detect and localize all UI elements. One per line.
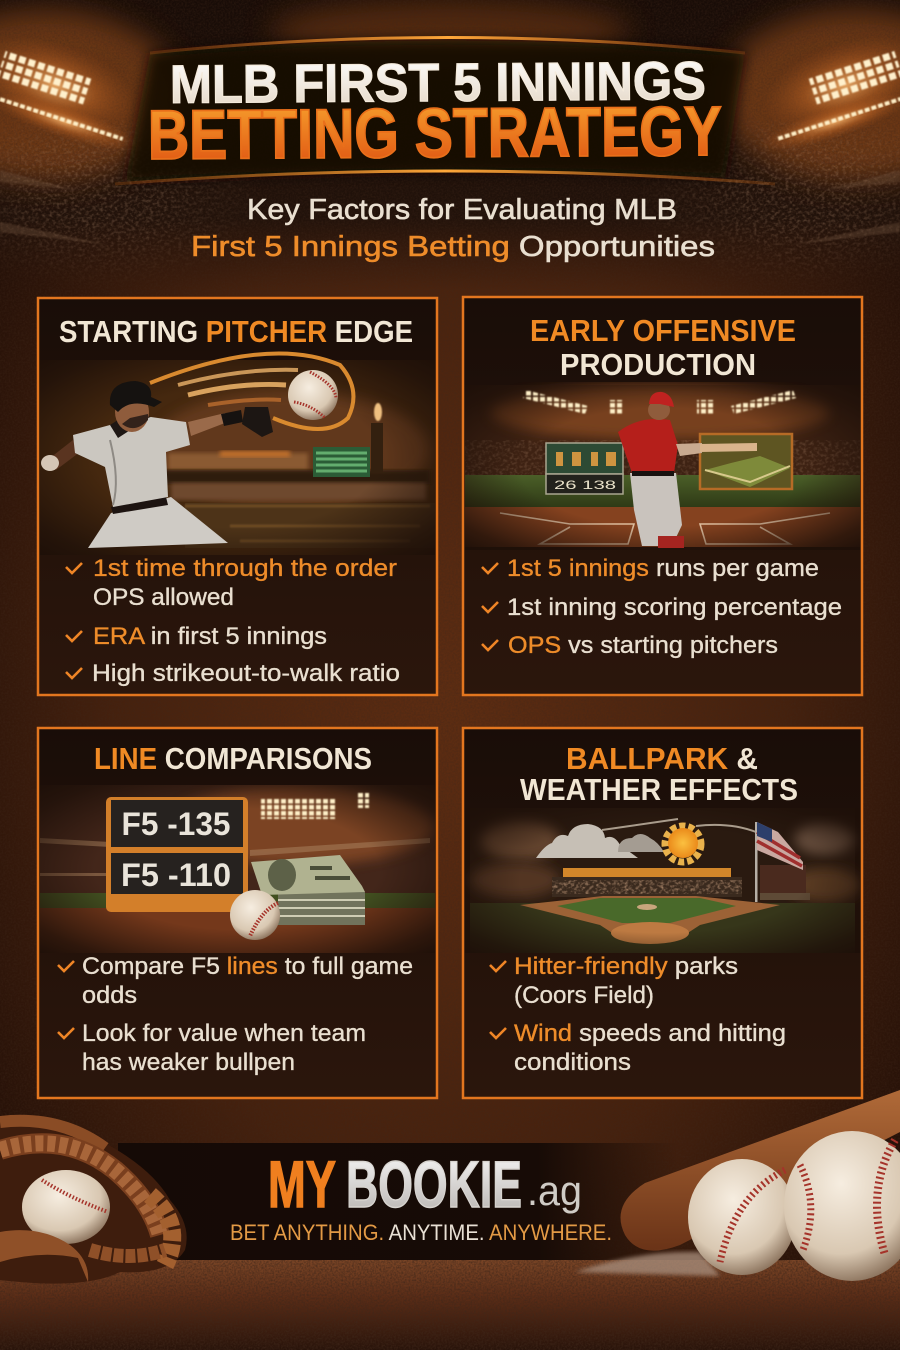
logo: MY	[268, 1147, 336, 1221]
motion swoosh	[150, 353, 353, 429]
checklist: offense: 1st inning scoring percentage	[507, 594, 842, 621]
checklist: line comparisons: has weaker bullpen	[82, 1049, 295, 1076]
baseball	[288, 370, 338, 420]
checklist: offense: OPS vs starting pitchers	[508, 632, 778, 659]
panel: ballpark and weather	[463, 728, 862, 1098]
odds board	[106, 797, 248, 912]
stands	[552, 865, 810, 900]
checklist: ballpark: Hitter-friendly parks	[514, 953, 738, 980]
heading: early offensive production: EARLY OFFENSIVE	[530, 313, 796, 348]
title line 1: MLB FIRST 5 INNINGS	[170, 51, 706, 115]
illustration: odds board and cash	[40, 785, 435, 953]
panel: line comparisons	[38, 728, 437, 1098]
checklist: ballpark: Wind speeds and hitting	[514, 1020, 786, 1047]
checklist: line comparisons: Compare F5 lines to full game	[82, 953, 413, 980]
illustration: ballpark	[465, 808, 860, 953]
infield	[520, 896, 780, 944]
footer logo block	[118, 1142, 683, 1260]
checklist: line comparisons: Look for value when team	[82, 1020, 366, 1047]
icon: bat and baseballs	[575, 1090, 900, 1281]
clouds	[536, 824, 664, 858]
cash stack	[251, 855, 365, 925]
stadium lamps	[261, 792, 369, 819]
checklist: offense	[482, 555, 842, 659]
heading: ballpark and weather	[520, 741, 798, 807]
checklist: ballpark	[490, 953, 786, 1076]
pitcher figure	[41, 381, 273, 548]
checklist: line comparisons	[58, 953, 413, 1076]
checklist: pitcher: OPS allowed	[93, 584, 234, 611]
stadium lights left	[0, 19, 149, 162]
scoreboard	[546, 443, 623, 494]
odds board: F5 -135	[122, 806, 230, 842]
tagline: BET ANYTHING. ANYTIME. ANYWHERE.	[230, 1220, 612, 1245]
flag	[755, 822, 803, 902]
sun	[665, 826, 701, 862]
heading: ballpark and weather: BALLPARK &	[566, 741, 758, 776]
icon: glove and ball	[0, 1118, 187, 1284]
title line 2: BETTING STRATEGY	[148, 92, 722, 174]
checklist: ballpark: conditions	[514, 1049, 631, 1076]
checklist: pitcher: ERA in first 5 innings	[93, 623, 327, 650]
baseball	[230, 890, 280, 940]
batter figure	[618, 392, 757, 548]
checklist: pitcher: High strikeout-to-walk ratio	[92, 660, 400, 687]
scoreboard	[313, 447, 370, 477]
title banner	[115, 38, 775, 184]
checklist: offense: 1st 5 innings runs per game	[507, 555, 819, 582]
ground: infield dirt	[0, 1260, 900, 1350]
scoreboard: 26 138	[554, 478, 617, 492]
heading: line comparisons: LINE COMPARISONS	[94, 741, 372, 776]
checklist: ballpark: (Coors Field)	[514, 982, 654, 1009]
heading: early offensive production	[530, 313, 796, 382]
logo: BOOKIE	[346, 1147, 522, 1221]
checklist: line comparisons: odds	[82, 982, 137, 1009]
heading: ballpark and weather: WEATHER EFFECTS	[520, 772, 798, 807]
checklist: pitcher: 1st time through the order	[93, 555, 397, 582]
panel: early offensive production	[463, 297, 862, 695]
illustration: batter	[465, 384, 860, 550]
odds board: F5 -110	[121, 857, 231, 893]
subtitle	[191, 194, 715, 263]
subtitle: Key Factors for Evaluating MLB	[247, 194, 677, 226]
logo	[268, 1147, 582, 1221]
illustration: pitcher	[40, 353, 435, 555]
field diagram board	[700, 434, 792, 489]
subtitle: First 5 Innings Betting Opportunities	[191, 231, 715, 263]
panel: starting pitcher edge	[38, 298, 437, 695]
stadium lights right	[751, 19, 900, 162]
stadium lamps	[523, 390, 796, 414]
heading: early offensive production: PRODUCTION	[560, 347, 756, 382]
checklist: pitcher	[66, 555, 400, 687]
logo: .ag	[527, 1167, 582, 1214]
heading: starting pitcher edge: STARTING PITCHER EDGE	[59, 314, 413, 349]
